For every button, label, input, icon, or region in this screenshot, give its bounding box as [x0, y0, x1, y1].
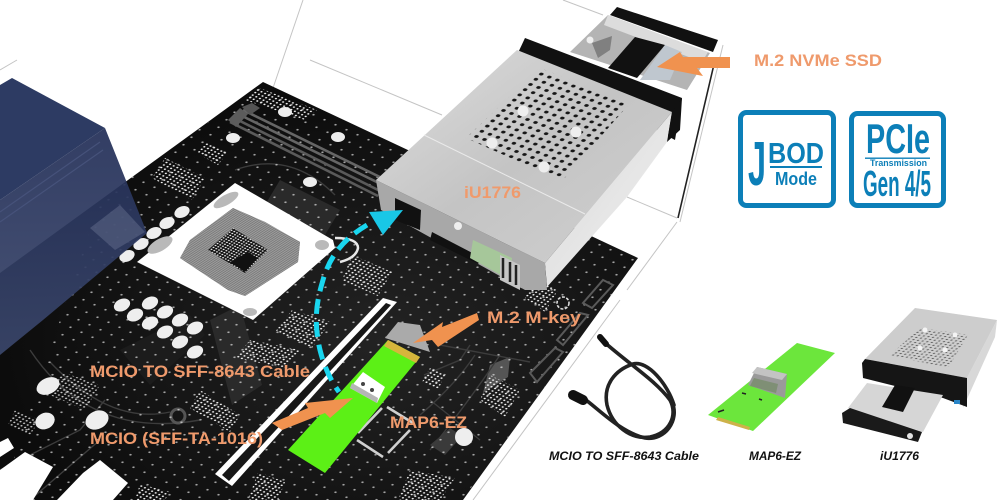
arrow: MCIO [272, 398, 353, 430]
case wireframe lines [0, 0, 723, 500]
badge: PCIe Transmission Gen 4/5: Gen 4/5 [863, 163, 931, 204]
label: MAP6-EZ: MAP6-EZ [390, 413, 467, 432]
badge: PCIe Transmission Gen 4/5: Transmission [870, 158, 927, 168]
iU1776 enclosure [376, 38, 682, 290]
product: cable [573, 337, 674, 438]
MCIO connector [350, 372, 385, 403]
M.2 SSD [608, 37, 665, 78]
badge: JBOD Mode [740, 112, 834, 206]
rear tray with M.2 SSD [570, 7, 718, 90]
badge: PCIe Transmission Gen 4/5: PCIe [866, 115, 930, 162]
chip connector bars [357, 407, 413, 457]
label: iU1776: iU1776 [464, 183, 521, 202]
badge: JBOD Mode: Mode [775, 169, 817, 189]
IO ports [0, 438, 128, 500]
caption: MAP6-EZ: MAP6-EZ [749, 451, 802, 463]
cable routing dashed line [316, 210, 403, 392]
psu box [0, 78, 147, 355]
product: iU1776 [842, 308, 997, 442]
badge: JBOD Mode: J [748, 130, 766, 199]
RAM slots [228, 103, 392, 196]
label: MCIO TO SFF-8643 Cable: MCIO TO SFF-8643 Cable [90, 362, 310, 381]
capacitors [33, 107, 473, 446]
white component dot clusters [0, 82, 640, 500]
MAP6-EZ card on board [288, 340, 420, 473]
CPU socket [137, 183, 358, 320]
front ports [395, 198, 421, 230]
product: MAP6-EZ [708, 343, 835, 431]
M.2 socket [385, 322, 430, 352]
SATA connectors [530, 280, 613, 382]
badge: PCIe Transmission Gen 4/5 [852, 114, 944, 206]
PCIe slot [215, 298, 397, 486]
arrow: M.2 SSD [657, 52, 730, 76]
caption: iU1776: iU1776 [880, 451, 920, 463]
badge: JBOD Mode: BOD [768, 138, 824, 170]
caption: MCIO TO SFF-8643 Cable: MCIO TO SFF-8643 Cable [549, 451, 700, 463]
board traces and grey patches [120, 180, 510, 455]
motherboard [0, 82, 640, 500]
label: MCIO (SFF-TA-1016): MCIO (SFF-TA-1016) [90, 429, 263, 448]
arrow: M.2 M-key [413, 313, 479, 347]
mounting ring [557, 297, 569, 309]
label: M.2 M-key: M.2 M-key [487, 308, 582, 327]
label: M.2 NVMe SSD: M.2 NVMe SSD [754, 51, 882, 70]
vent holes [466, 68, 630, 181]
